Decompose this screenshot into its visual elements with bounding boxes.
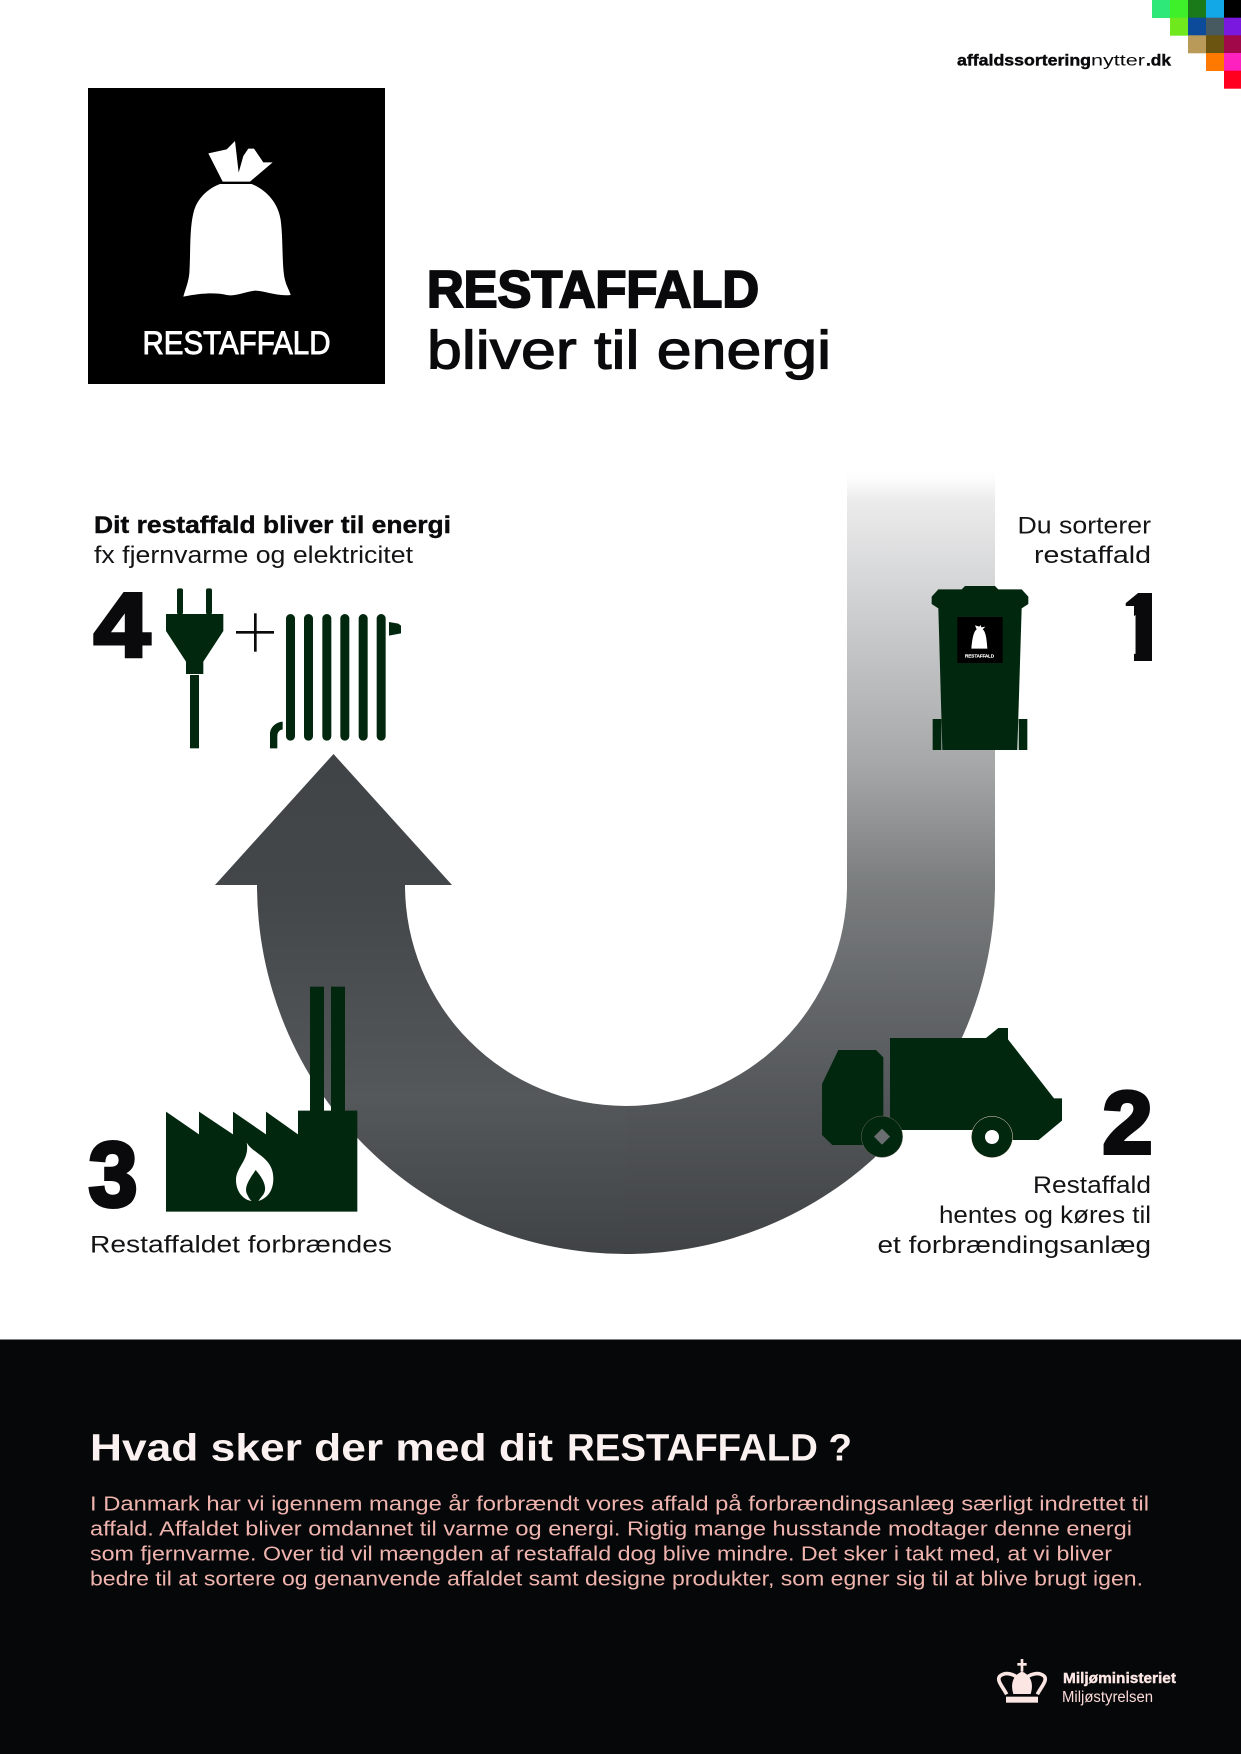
panel heading: RESTAFFALD ? [567,1428,852,1470]
panel body text: som fjernvarme. Over tid vil mængden af restaffald dog blive mindre. Det sker i takt med, at vi bliver [90,1543,1112,1566]
step 3: incineration [88,987,392,1258]
ministry name: Miljøministeriet [1063,1670,1176,1687]
panel heading [90,1428,852,1470]
website url: nytter [1091,52,1145,70]
panel body text: I Danmark har vi igennem mange år forbrændt vores affald på forbrændingsanlæg særligt indrettet til [90,1493,1149,1516]
step 1 caption [1018,512,1151,569]
number 4: 4 [94,576,150,676]
colour pixel mosaic [1152,0,1241,89]
number 3: 3 [88,1124,138,1226]
agency name: Miljøstyrelsen [1062,1689,1153,1706]
panel body text [90,1493,1149,1591]
title: RESTAFFALD [427,261,759,319]
step 4 caption: fx fjernvarme og elektricitet [94,542,413,569]
icon: wheelie bin: RESTAFFALD [965,653,994,659]
number 1: 1 [1119,575,1165,691]
website url [957,52,1171,70]
ministry logo [999,1659,1176,1706]
process arrow [215,470,995,1254]
icon: crown [999,1659,1045,1703]
number 2: 2 [1102,1073,1152,1172]
icon: wheelie bin [932,586,1028,750]
step 1 caption: Du sorterer [1018,512,1151,540]
step 4: energy [94,512,451,748]
step 2 caption [878,1172,1151,1259]
panel body text: affald. Affaldet bliver omdannet til varme og energi. Rigtig mange husstande modtager denne energi [90,1518,1132,1541]
dark info panel [0,1340,1241,1754]
panel heading: Hvad sker der med dit [90,1428,553,1470]
icon: waste bag [183,141,291,297]
title [427,261,831,380]
plus sign [236,613,274,652]
step 1: du sorterer [932,512,1165,750]
website url: affaldssortering [957,52,1091,70]
restaffald pictogram tile [88,88,385,384]
icon: garbage truck [822,1028,1062,1158]
website url: .dk [1146,52,1171,70]
step 1 caption: restaffald [1034,542,1151,569]
step 4 caption: Dit restaffald bliver til energi [94,512,451,539]
title: bliver til energi [427,320,831,380]
icon: factory [166,987,357,1212]
step 2 caption: hentes og køres til [939,1202,1151,1229]
icon: radiator [270,614,401,748]
panel body text: bedre til at sortere og genanvende affaldet samt designe produkter, som egner sig til at blive brugt igen. [90,1568,1143,1591]
step 2: truck [822,1028,1152,1259]
step 3 caption: Restaffaldet forbrændes [90,1232,392,1258]
icon: electric plug [166,588,223,748]
step 2 caption: et forbrændingsanlæg [878,1232,1151,1259]
step 4 caption [94,512,451,569]
tile label: RESTAFFALD [142,325,330,361]
step 2 caption: Restaffald [1033,1172,1151,1199]
